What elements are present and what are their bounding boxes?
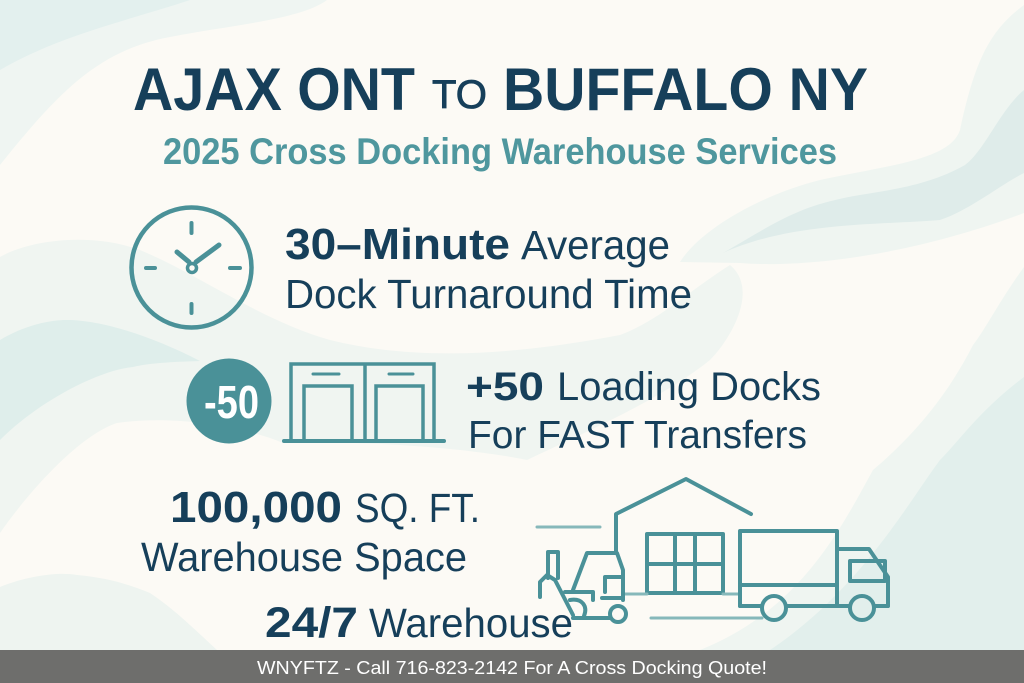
truck: [651, 531, 888, 620]
text: warehouse space: SQ. FT.: [355, 485, 480, 531]
text: warehouse space: 100,000: [170, 483, 342, 532]
title: AJAX ONT: [133, 56, 415, 123]
title: [133, 56, 868, 123]
text: loading docks: Loading Docks: [557, 365, 821, 409]
text: loading docks: +50: [466, 365, 544, 409]
text: dock turnaround: Average: [521, 222, 670, 268]
footer bar: WNYFTZ - Call 716-823-2142 For A Cross Docking Quote!: [257, 658, 767, 678]
icon: warehouse, forklift and truck: [537, 479, 888, 622]
warehouse: [537, 479, 751, 594]
text: loading docks: For FAST Transfers: [468, 414, 807, 457]
icon: loading docks: [284, 364, 444, 441]
text: dock turnaround: [285, 220, 692, 317]
icon: 50 badge: [186, 358, 272, 444]
subtitle: 2025 Cross Docking Warehouse Services: [163, 131, 837, 172]
text: dock turnaround: 30–Minute: [285, 220, 510, 269]
forklift: [540, 552, 626, 622]
icon: clock: [132, 208, 252, 328]
text: 24/7 warehouse: 24/7: [265, 599, 358, 647]
text: warehouse space: Warehouse Space: [141, 534, 467, 580]
text: warehouse space: [141, 483, 480, 580]
text: 24/7 warehouse: [265, 599, 573, 647]
text: loading docks: [466, 365, 821, 457]
title: TO: [432, 73, 487, 117]
icon: 50 badge: -50: [204, 376, 259, 428]
text: dock turnaround: Dock Turnaround Time: [285, 271, 692, 317]
title: BUFFALO NY: [503, 56, 868, 123]
text: 24/7 warehouse: Warehouse: [369, 600, 573, 646]
footer bar: [0, 650, 1024, 683]
